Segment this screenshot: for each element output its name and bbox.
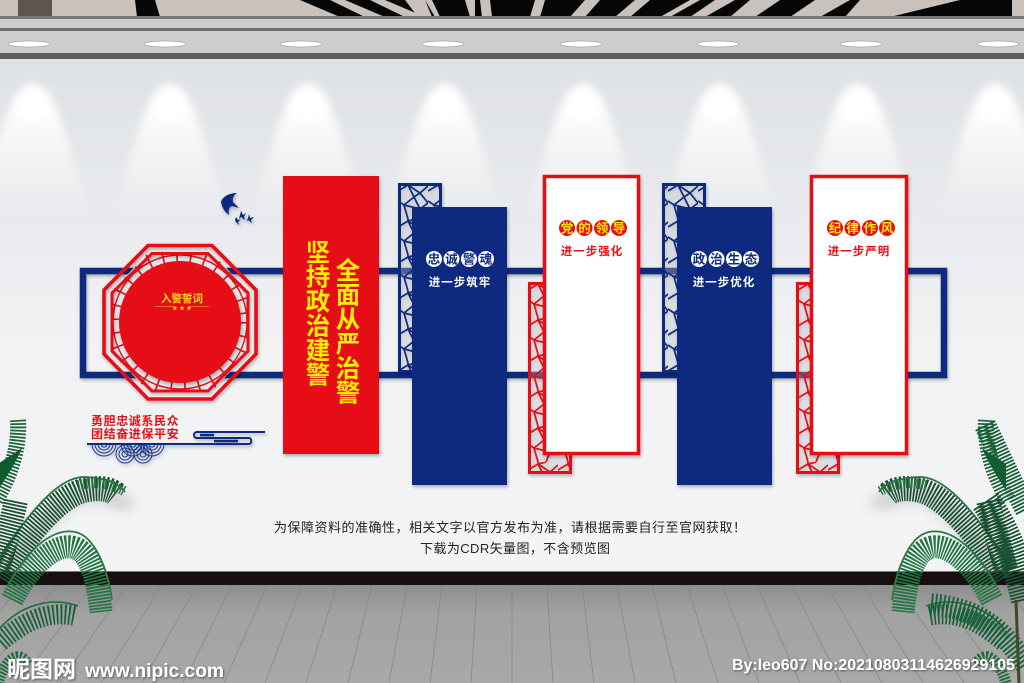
plant: left palm: [0, 420, 128, 683]
lattice blue: [400, 184, 440, 372]
banner headline left: 坚持政治建警: [306, 240, 330, 390]
lattice red: [530, 284, 570, 472]
banner headline right: 全面从严治警: [336, 257, 361, 408]
panel: loyalty blue: [400, 184, 507, 485]
disclaimer text: [274, 520, 746, 556]
panel: red banner: [283, 176, 379, 454]
slogan: courage and loyalty: 勇胆忠诚系民众: [91, 413, 179, 428]
watermark: site logo: 昵图网: [7, 656, 76, 682]
slogan: courage and loyalty: [91, 413, 179, 441]
panel: octagon emblem: [104, 246, 256, 399]
lattice blue: [664, 184, 704, 372]
subtitle: 进一步严明: [828, 244, 890, 258]
label: loyalty: 忠诚警魂: [428, 252, 493, 266]
red disc: [119, 261, 241, 383]
subtitle: 进一步强化: [561, 244, 623, 258]
lattice red: [798, 284, 838, 472]
label: party leadership: 党的领导: [561, 220, 625, 236]
octagon frames: [104, 246, 256, 399]
baseboard: [0, 571, 1024, 585]
disc title: 入警誓词: [161, 292, 203, 305]
ceiling light rail: [0, 16, 1024, 60]
label: discipline: 纪律作风: [829, 220, 894, 236]
disc title ornament: ★ ★ ★: [172, 306, 192, 312]
watermark: author id: By:leo607 No:20210803114626929105: [732, 657, 1015, 674]
disc title ornament: [155, 306, 209, 312]
blue horizontal frame: [83, 271, 944, 375]
floor: [0, 585, 1024, 683]
panel: political ecology: [664, 184, 772, 485]
disclaimer text: 为保障资料的准确性，相关文字以官方发布为准，请根据需要自行至官网获取！: [274, 520, 746, 535]
disclaimer text: 下载为CDR矢量图，不含预览图: [420, 541, 610, 556]
ceiling: [0, 0, 1024, 17]
watermark: site logo: [7, 656, 224, 682]
subtitle: 进一步优化: [693, 275, 755, 289]
icon: swallows: [221, 193, 254, 225]
subtitle: 进一步筑牢: [429, 275, 491, 289]
slogan: courage and loyalty: 团结奋进保平安: [91, 426, 179, 441]
watermark: site logo: www.nipic.com: [84, 661, 224, 682]
plant: right palm: [876, 420, 1024, 683]
wall spotlights: [0, 84, 1024, 215]
wall: [0, 59, 1024, 572]
ornament: auspicious clouds and scroll line: [87, 432, 265, 463]
panel: party leadership: [530, 176, 638, 472]
panel: discipline: [798, 176, 906, 472]
label: political ecology: 政治生态: [693, 252, 758, 266]
